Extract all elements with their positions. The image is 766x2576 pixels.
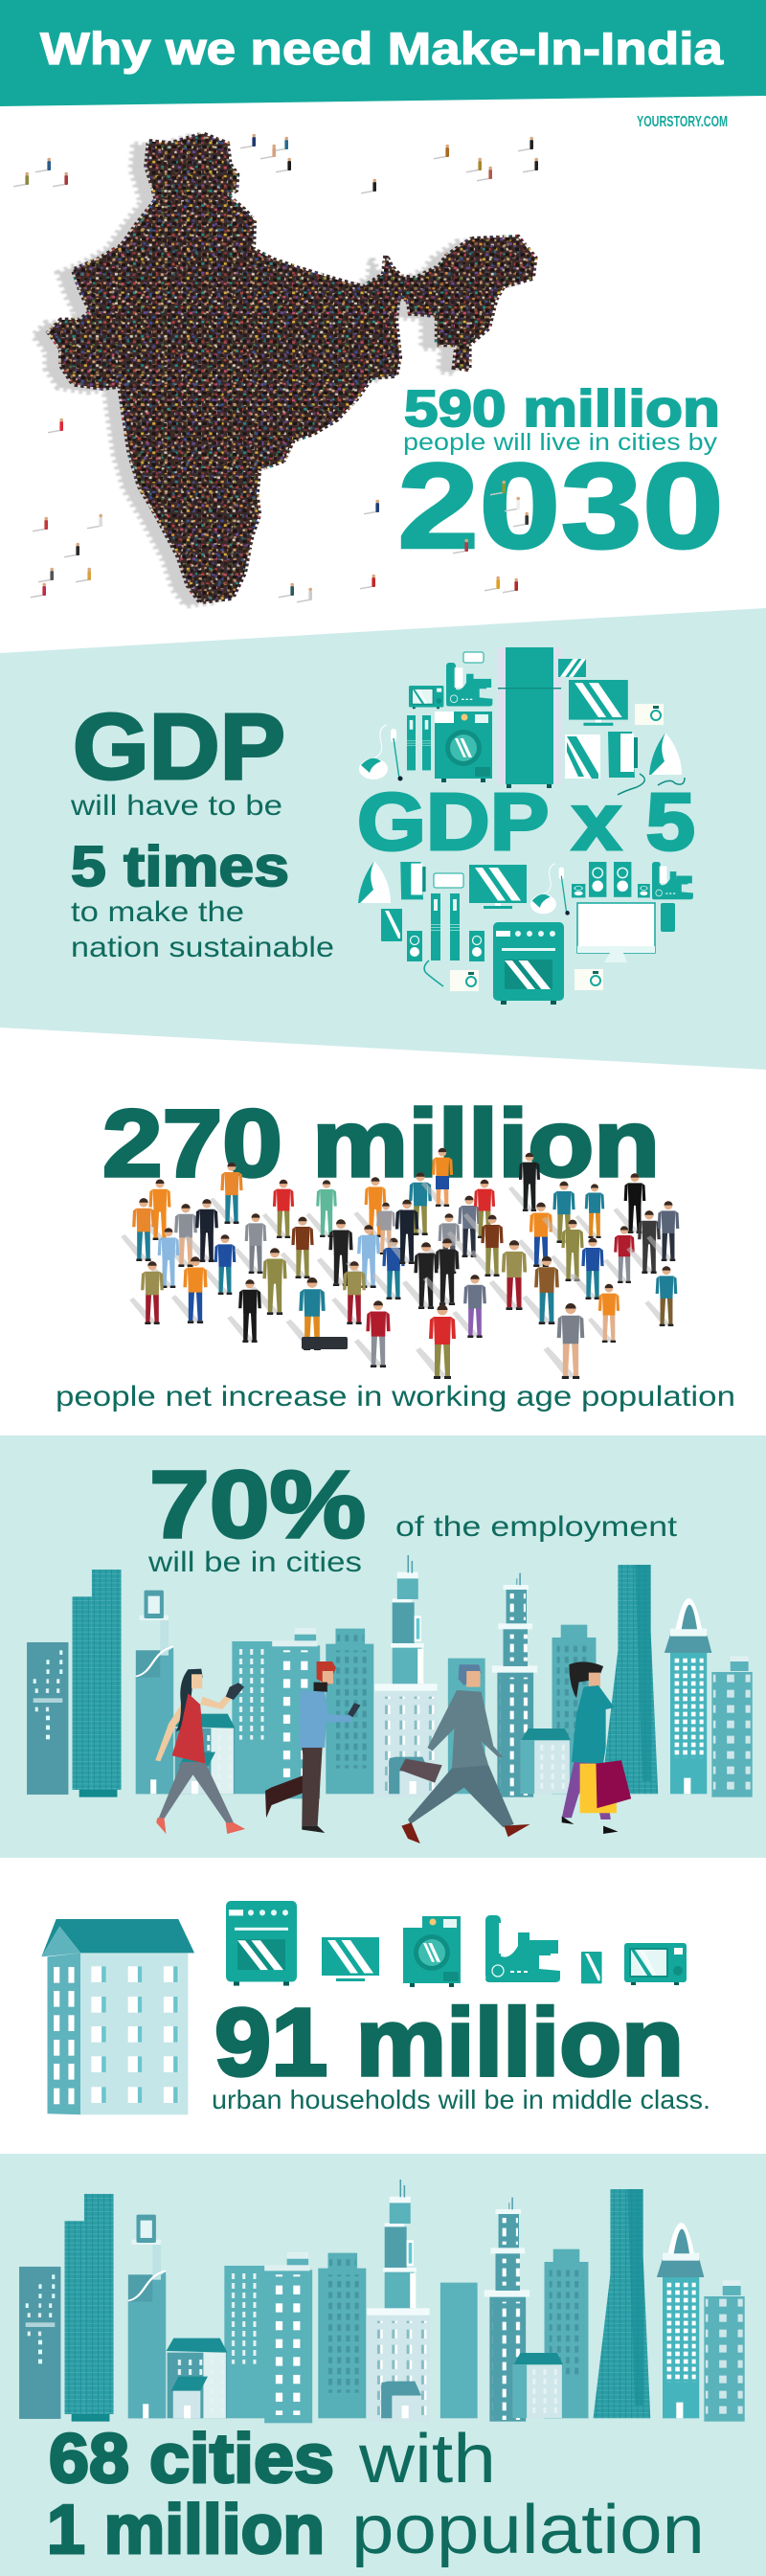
businessman with briefcase — [399, 1664, 530, 1843]
panel: 91 million households — [41, 1901, 710, 2114]
headline 70%: 70% — [149, 1451, 366, 1557]
panel: GDP x 5 — [0, 608, 766, 1070]
crowd of workers — [121, 1148, 679, 1379]
text: 1 million: 1 million — [47, 2492, 325, 2568]
text: 68 cities: 68 cities — [49, 2421, 334, 2497]
panel: 68 cities — [0, 2154, 766, 2576]
year 2030: 2030 — [397, 438, 724, 574]
text: 5 times: 5 times — [71, 835, 289, 898]
panel background — [0, 1435, 766, 1858]
panel background — [0, 2154, 766, 2576]
text: with: with — [358, 2421, 496, 2497]
scattered small people — [13, 134, 538, 602]
caption: urban households will be in middle class. — [212, 2085, 710, 2114]
city skyline — [19, 2180, 745, 2423]
header banner — [0, 0, 766, 106]
title: Why we need Make-In-India — [40, 23, 724, 74]
headline 590 million: 590 million — [404, 380, 720, 438]
caption: people will live in cities by — [403, 429, 718, 456]
appliance cluster bottom — [358, 861, 693, 1005]
crowd map of India — [34, 134, 535, 605]
text: to make the: to make the — [71, 896, 244, 928]
woman with shopping bags — [562, 1661, 631, 1834]
GDP heading: GDP — [73, 694, 285, 799]
man with red hat — [265, 1661, 361, 1833]
city skyline — [27, 1555, 753, 1798]
woman with phone — [155, 1669, 245, 1834]
panel: 590 million people — [13, 134, 724, 605]
text: nation sustainable: nation sustainable — [71, 932, 334, 963]
caption: people net increase in working age population — [56, 1381, 735, 1412]
text: will be in cities: will be in cities — [147, 1547, 362, 1578]
panel: 70 percent employment — [0, 1435, 766, 1858]
appliance row — [226, 1901, 687, 1987]
walking commuters — [155, 1661, 631, 1843]
panel: 270 million — [56, 1090, 735, 1412]
text: will have to be: will have to be — [70, 790, 282, 822]
text: of the employment: of the employment — [395, 1511, 678, 1543]
headline 270 million: 270 million — [102, 1090, 660, 1196]
appliance cluster top — [359, 647, 685, 795]
panel background — [0, 608, 766, 1070]
GDP x 5 label: GDP x 5 — [357, 777, 695, 867]
headline 91 million: 91 million — [214, 1989, 684, 2096]
text: population: population — [351, 2492, 705, 2568]
apartment building — [41, 1919, 194, 2114]
